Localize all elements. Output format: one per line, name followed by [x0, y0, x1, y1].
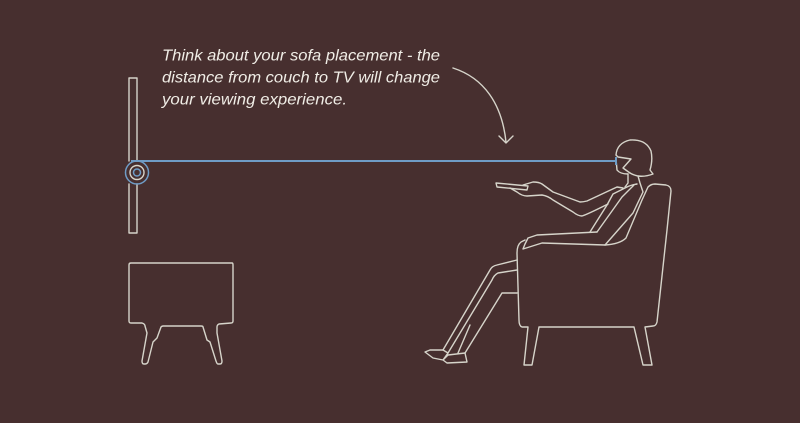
remote control	[496, 183, 528, 190]
illustration: person seated in armchair	[425, 140, 671, 365]
callout text	[161, 48, 440, 108]
callout text: distance from couch to TV will change	[162, 70, 440, 86]
hair	[616, 140, 653, 176]
sight line from TV to viewer	[131, 160, 616, 162]
outstretched arm	[510, 182, 623, 216]
shoes	[425, 350, 467, 363]
armchair	[517, 184, 671, 365]
icon: TV stand	[129, 263, 233, 364]
resting arm	[523, 232, 605, 249]
callout text: your viewing experience.	[161, 92, 347, 108]
icon: wall-mounted TV	[126, 78, 148, 233]
neck and torso	[590, 174, 643, 245]
callout text: Think about your sofa placement - the	[162, 48, 440, 64]
eye marker	[615, 157, 617, 165]
legs	[443, 260, 517, 353]
face	[616, 155, 631, 174]
arrow: callout to sight line	[453, 68, 513, 143]
